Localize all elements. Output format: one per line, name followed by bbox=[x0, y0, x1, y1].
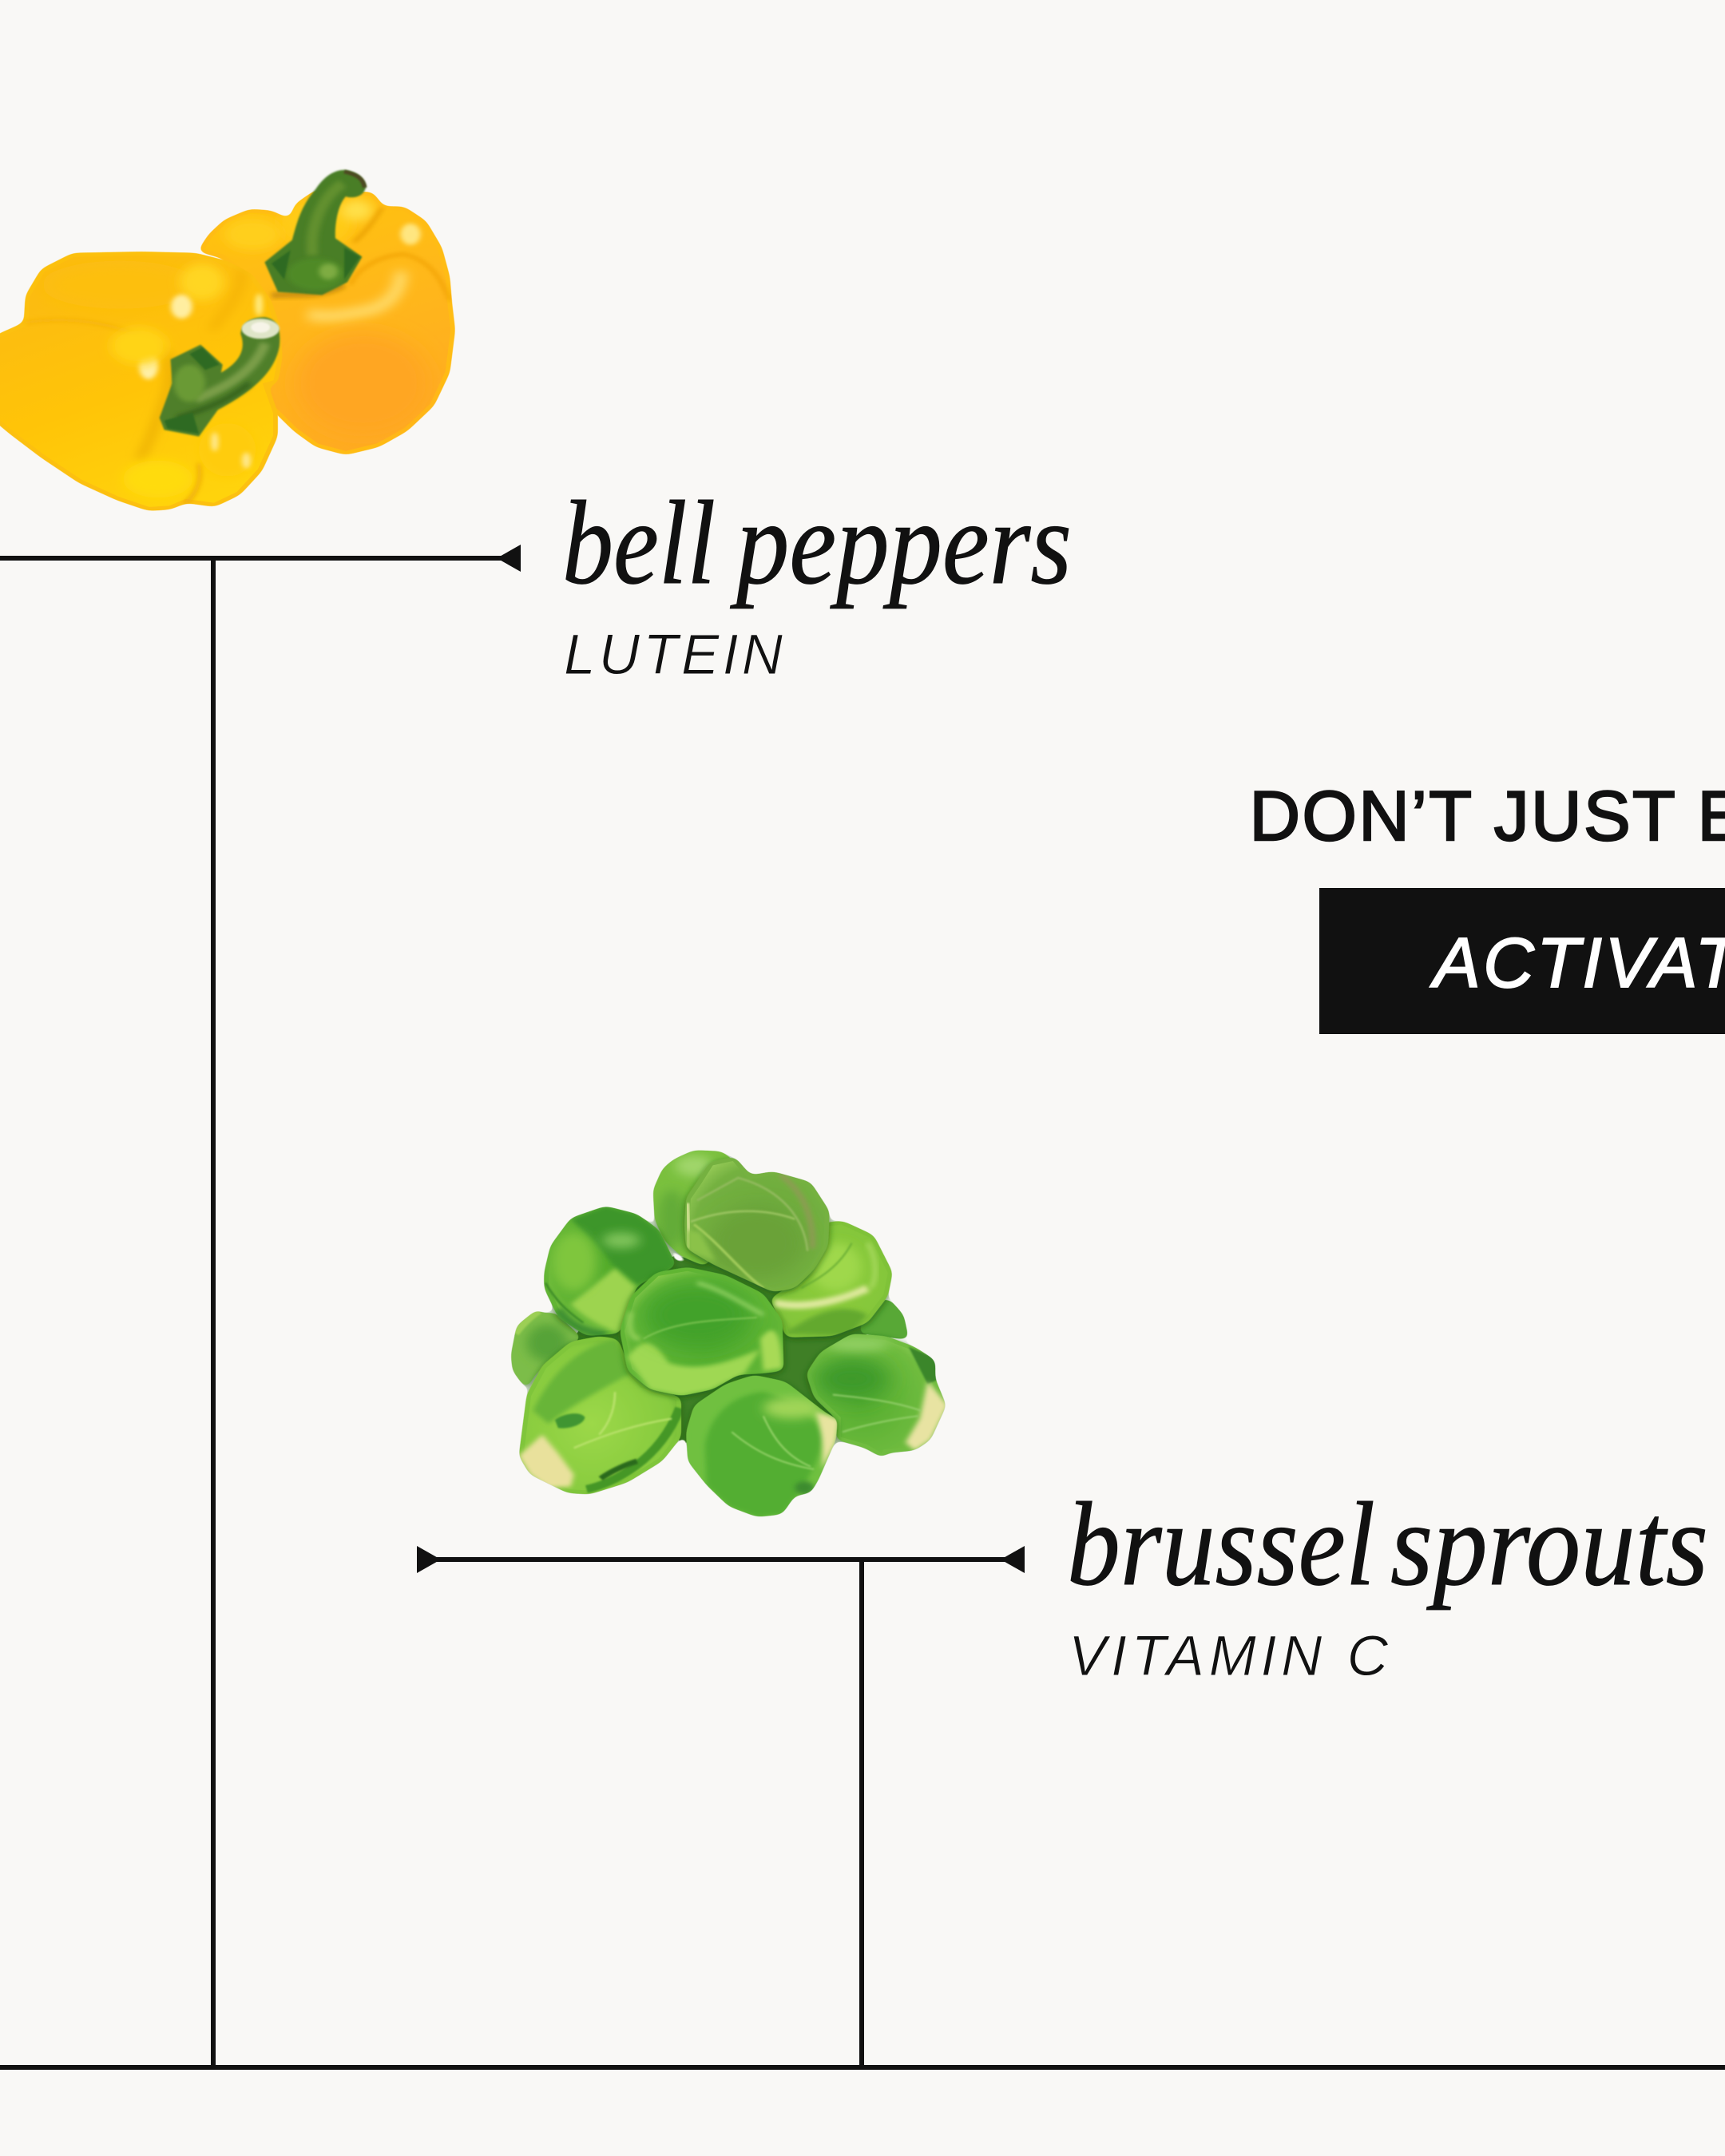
icon: yellow bell peppers photo bbox=[0, 170, 455, 511]
sprout lower left bbox=[518, 1336, 681, 1495]
sprout cluster bbox=[511, 1150, 948, 1517]
back pepper bbox=[197, 189, 455, 455]
black banner bbox=[1319, 888, 1725, 1034]
heading: brussel sprouts bbox=[1067, 1478, 1708, 1611]
sprout right bbox=[770, 1220, 893, 1338]
baseline rule bbox=[0, 2065, 1725, 2070]
heading: bell peppers: bell bbox=[562, 477, 716, 609]
sprout far left back bbox=[511, 1307, 582, 1390]
heading: bell peppers bbox=[562, 477, 1072, 609]
heading: bell peppers: peppers bbox=[730, 477, 1072, 609]
nutrient label: vitamin c: VITAMIN C bbox=[1069, 1625, 1389, 1688]
heading: brussel sprouts: brussel bbox=[1067, 1478, 1375, 1611]
icon: brussel sprouts photo bbox=[511, 1150, 948, 1517]
front pepper calyx and stem bbox=[160, 317, 280, 437]
sprout top back bbox=[650, 1150, 735, 1268]
sprout bottom centre bbox=[686, 1375, 839, 1517]
back pepper calyx and stem bbox=[264, 170, 366, 295]
sprout upper left bbox=[544, 1206, 678, 1336]
sprout far right back bbox=[861, 1300, 907, 1339]
sprout top front bbox=[684, 1156, 830, 1292]
nutrient label: lutein: LUTEIN bbox=[564, 624, 783, 687]
brussel sprouts connector lines and arrows bbox=[417, 1546, 1025, 2067]
bell peppers connector lines and arrow bbox=[0, 545, 521, 2067]
front pepper bbox=[0, 252, 283, 511]
sprout centre bbox=[620, 1267, 784, 1396]
sprout right lower bbox=[806, 1334, 948, 1459]
